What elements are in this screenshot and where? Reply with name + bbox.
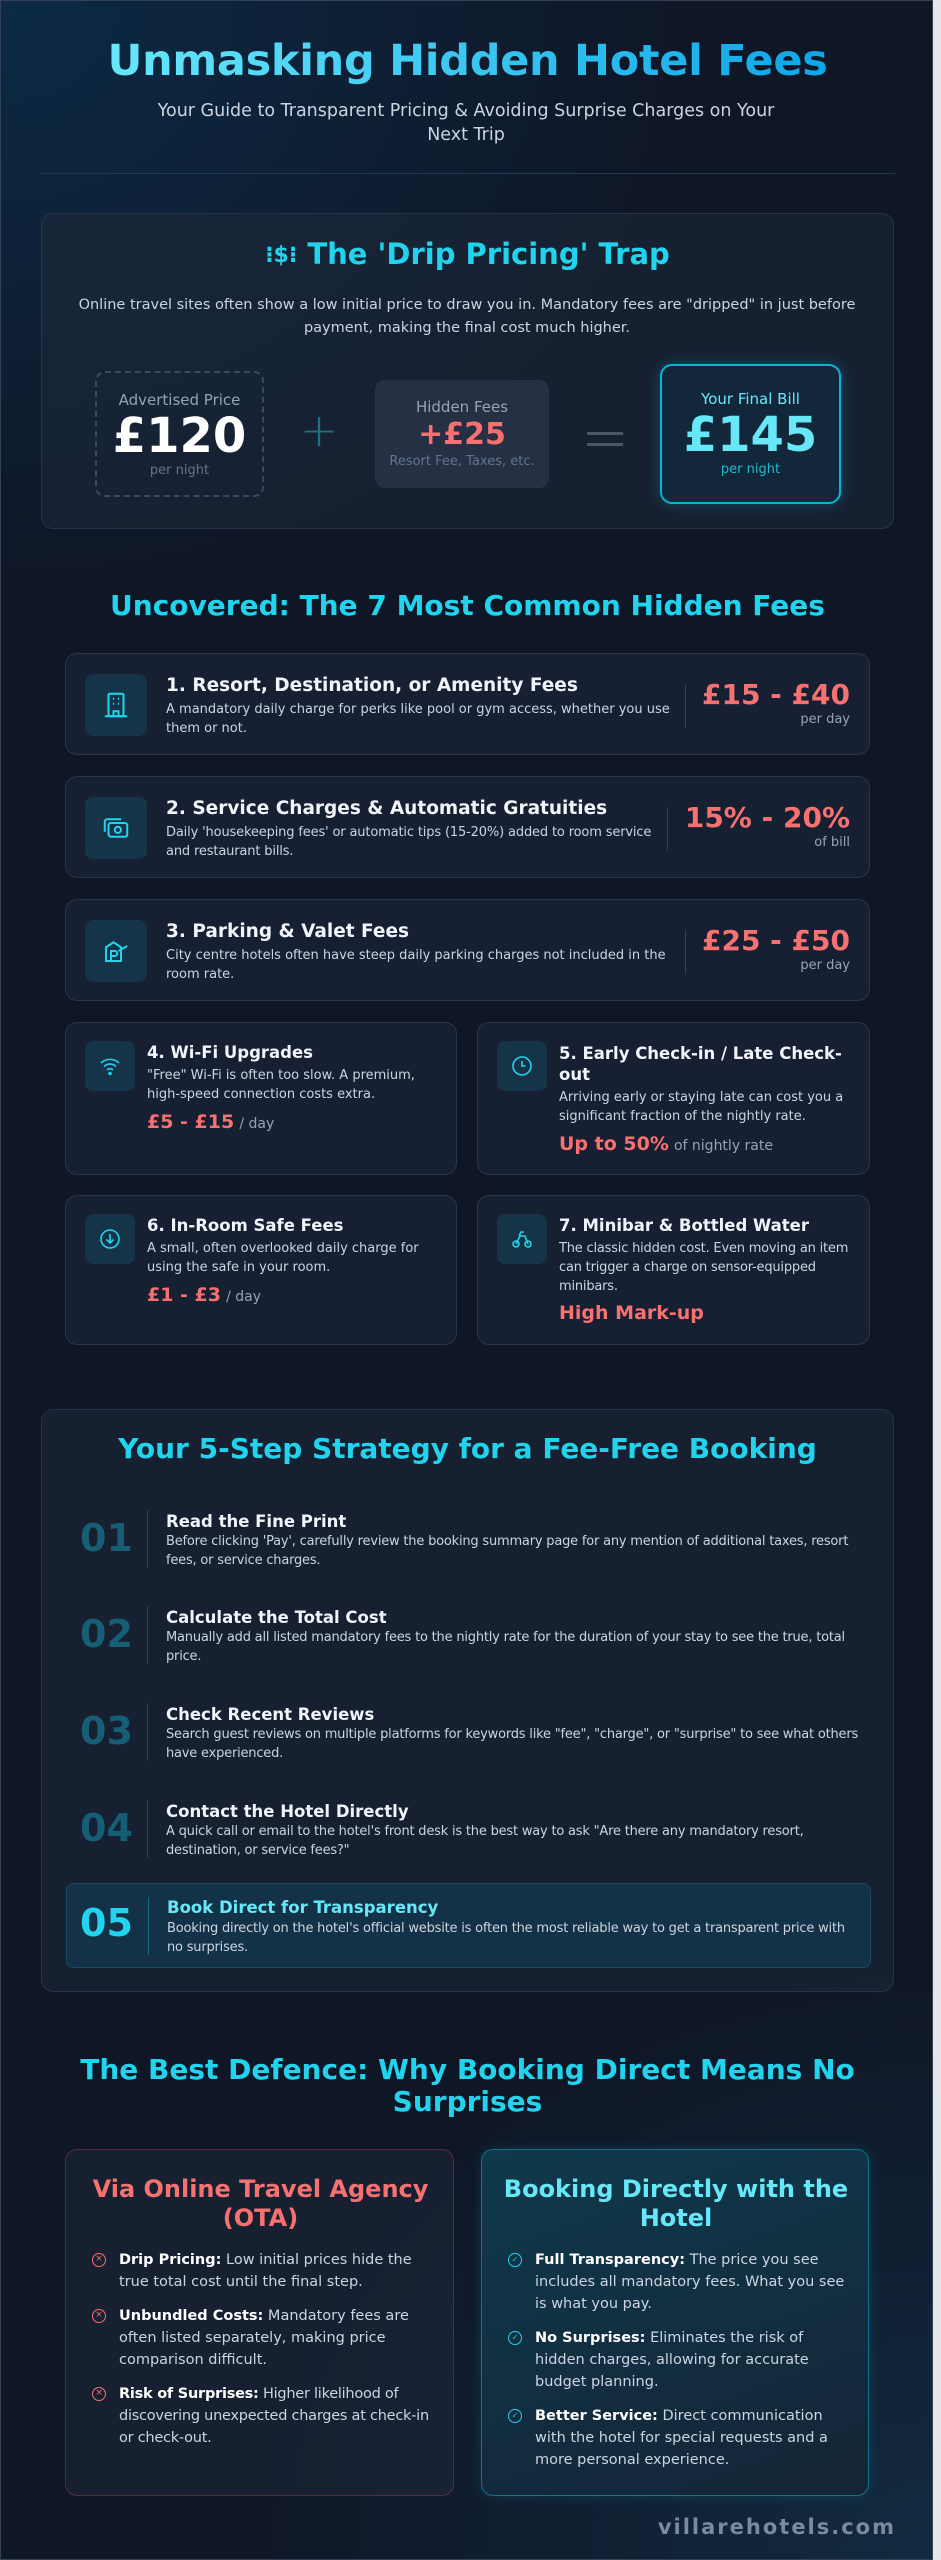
heading: strategy: Your 5-Step Strategy for a Fee-Free Booking — [118, 1432, 817, 1465]
card: fee 6 — [65, 1195, 457, 1345]
list: OTA downsides: × — [95, 2254, 103, 2264]
list: OTA downsides: Risk of Surprises: Higher likelihood of discovering unexpected charges at check‑in or check-out. — [119, 2386, 429, 2446]
price: per day — [800, 712, 850, 727]
step 2: 02 — [80, 1612, 133, 1656]
panel: 5-step strategy — [41, 1409, 894, 1992]
list: OTA downsides: Unbundled Costs: Mandatory fees are often listed separately, making price comparison difficult. — [119, 2308, 409, 2368]
step 5 highlighted: Book Direct for Transparency — [167, 1898, 438, 1917]
panel: direct booking — [481, 2149, 869, 2496]
price — [702, 924, 850, 973]
list: direct benefits: No Surprises: Eliminates the risk of hidden charges, allowing for accurate budget planning. — [535, 2330, 809, 2390]
card: fee 2 — [65, 776, 870, 878]
box: hidden fees: Hidden Fees — [416, 398, 508, 416]
desc: City centre hotels often have steep daily parking charges not included in the room rate. — [166, 948, 666, 982]
desc: A small, often overlooked daily charge for using the safe in your room. — [147, 1241, 419, 1275]
price: of bill — [814, 835, 850, 850]
step 2: Calculate the Total Cost — [166, 1608, 387, 1627]
box: advertised price: Advertised Price — [119, 391, 240, 409]
title: 2. Service Charges & Automatic Gratuities — [166, 798, 607, 819]
card: fee 4 — [65, 1022, 457, 1175]
step 3 — [80, 1703, 858, 1761]
box: final bill: Your Final Bill — [701, 390, 800, 408]
heading: drip pricing: ⁝$⁝ The 'Drip Pricing' Trap — [265, 237, 670, 271]
card: fee 3 — [65, 899, 870, 1001]
price: £15 - £40 — [702, 678, 850, 711]
box: hidden fees: Resort Fee, Taxes, etc. — [389, 454, 535, 469]
list: direct benefits: ✓ — [512, 2333, 518, 2342]
box: final bill: per night — [721, 462, 780, 477]
list: direct benefits: ✓ — [512, 2411, 518, 2420]
panel: drip pricing trap — [41, 213, 894, 529]
list: OTA downsides — [92, 2252, 429, 2446]
step 4: A quick call or email to the hotel's front desk is the best way to ask "Are there any mandatory resort, destination, or service fees?" — [166, 1824, 804, 1858]
step 2 — [80, 1606, 845, 1664]
price — [685, 801, 850, 850]
price: 15% - 20% — [685, 801, 850, 834]
step 3: 03 — [80, 1709, 133, 1753]
list: OTA downsides: × — [95, 2388, 103, 2398]
list: direct benefits: ✓ — [512, 2255, 518, 2264]
list: direct benefits: Full Transparency: The price you see includes all mandatory fees. What you see is what you pay. — [535, 2252, 844, 2312]
box: advertised price: £120 — [113, 408, 246, 464]
desc: Arriving early or staying late can cost you a significant fraction of the nightly rate. — [559, 1090, 843, 1124]
subtitle: Your Guide to Transparent Pricing & Avoiding Surprise Charges on Your Next Trip — [158, 101, 774, 145]
desc: The classic hidden cost. Even moving an item can trigger a charge on sensor-equipped minibars. — [559, 1241, 848, 1294]
title: 3. Parking & Valet Fees — [166, 921, 409, 942]
box: hidden fees: +£25 — [418, 417, 506, 452]
icon: wifi — [85, 1041, 135, 1091]
step 3: Search guest reviews on multiple platforms for keywords like "fee", "charge", or "surprise" to see what others have experienced. — [166, 1727, 858, 1761]
step 5 highlighted: Booking directly on the hotel's official website is often the most reliable way to get a transparent price with no surprises. — [167, 1921, 845, 1955]
title: 5. Early Check-in / Late Check-out — [559, 1044, 842, 1084]
box: advertised price — [95, 371, 264, 497]
price: £25 - £50 — [702, 924, 850, 957]
desc: A mandatory daily charge for perks like pool or gym access, whether you use them or not. — [166, 702, 670, 736]
heading: OTA: Via Online Travel Agency (OTA) — [93, 2175, 428, 2232]
footer: website: villarehotels.com — [658, 2515, 896, 2539]
title: 1. Resort, Destination, or Amenity Fees — [166, 675, 578, 696]
heading: best defence: The Best Defence: Why Booking Direct Means No Surprises — [80, 2053, 855, 2118]
title: 6. In-Room Safe Fees — [147, 1216, 343, 1235]
price: £1 - £3 / day — [147, 1284, 261, 1306]
price: £5 - £15 / day — [147, 1111, 274, 1133]
step 1: Read the Fine Print — [166, 1512, 346, 1531]
icon: equals — [587, 432, 623, 446]
icon: clock — [497, 1041, 547, 1091]
list: direct benefits: Better Service: Direct communication with the hotel for special requests and a more personal experience. — [535, 2408, 828, 2468]
title: Unmasking Hidden Hotel Fees — [107, 36, 828, 86]
step 4: Contact the Hotel Directly — [166, 1802, 409, 1821]
box: hidden fees — [375, 380, 549, 488]
card: fee 1 — [65, 653, 870, 755]
step 3: Check Recent Reviews — [166, 1705, 374, 1724]
list: OTA downsides: × — [95, 2310, 103, 2320]
box: advertised price: per night — [150, 463, 209, 478]
price — [702, 678, 850, 727]
list: OTA downsides: Drip Pricing: Low initial prices hide the true total cost until the final step. — [119, 2252, 412, 2290]
price: High Mark-up — [559, 1302, 704, 1324]
icon: parking — [85, 920, 147, 982]
icon: money — [85, 797, 147, 859]
desc: Daily 'housekeeping fees' or automatic tips (15-20%) added to room service and restaurant bills. — [166, 825, 651, 859]
price: per day — [800, 958, 850, 973]
box: final bill — [660, 364, 841, 504]
icon: plus: + — [300, 403, 338, 457]
step 2: Manually add all listed mandatory fees to the nightly rate for the duration of your stay to see the true, total price. — [166, 1630, 845, 1664]
step 4: 04 — [80, 1806, 133, 1850]
step 1 — [80, 1510, 848, 1568]
heading: direct: Booking Directly with the Hotel — [504, 2175, 848, 2232]
step 4 — [80, 1800, 804, 1858]
card: fee 5 — [477, 1022, 870, 1175]
step 5 highlighted: 05 — [80, 1901, 133, 1945]
icon: minibar — [497, 1214, 547, 1264]
icon: building — [85, 674, 147, 736]
list: direct benefits — [508, 2252, 844, 2468]
icon: safe — [85, 1214, 135, 1264]
desc: "Free" Wi-Fi is often too slow. A premium, high-speed connection costs extra. — [147, 1068, 415, 1102]
heading: 7 hidden fees: Uncovered: The 7 Most Common Hidden Fees — [110, 589, 825, 622]
card: fee 7 — [477, 1195, 870, 1345]
title: 7. Minibar & Bottled Water — [559, 1216, 809, 1235]
price: Up to 50% of nightly rate — [559, 1133, 773, 1155]
text: explanation: Online travel sites often show a low initial price to draw you in. Mandatory fees are "dripped" in just before payment, making the final cost much higher. — [79, 297, 855, 336]
title: 4. Wi-Fi Upgrades — [147, 1043, 313, 1062]
box: final bill: £145 — [684, 407, 817, 463]
step 5 highlighted — [66, 1883, 871, 1968]
step 1: Before clicking 'Pay', carefully review the booking summary page for any mention of additional taxes, resort fees, or service charges. — [166, 1534, 848, 1568]
step 1: 01 — [80, 1516, 133, 1560]
panel: OTA — [65, 2149, 454, 2496]
